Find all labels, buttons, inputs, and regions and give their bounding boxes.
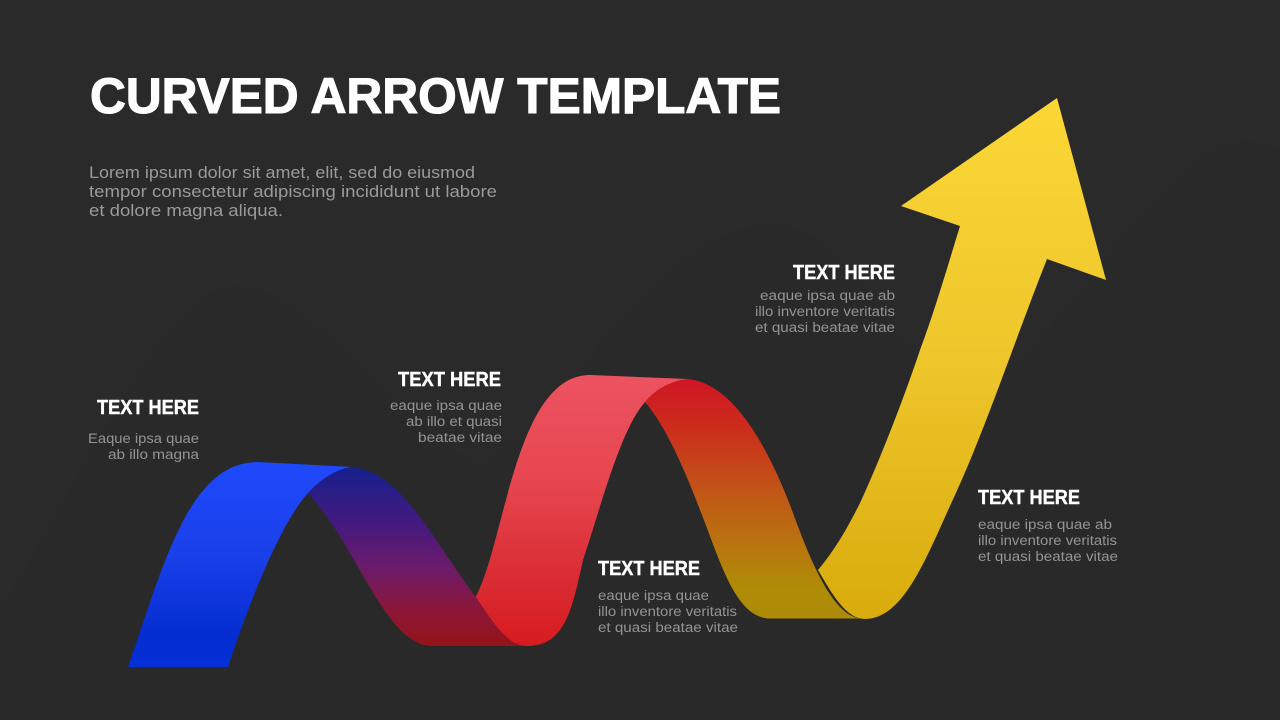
label 1 bbox=[88, 397, 200, 462]
label 2: beatae vitae bbox=[418, 430, 502, 445]
curved arrow ribbon bbox=[128, 98, 1106, 667]
label 1: Eaque ipsa quae bbox=[88, 431, 199, 446]
title: CURVED ARROW TEMPLATE bbox=[90, 68, 781, 124]
ribbon: purple fold bbox=[308, 467, 527, 646]
label 5: TEXT HERE bbox=[978, 487, 1080, 509]
intro text: Lorem ipsum dolor sit amet, elit, sed do eiusmod bbox=[89, 164, 475, 182]
intro text bbox=[89, 164, 497, 220]
label 3: illo inventore veritatis bbox=[598, 604, 737, 619]
ribbon: blue start segment bbox=[128, 462, 352, 667]
label 2: ab illo et quasi bbox=[406, 414, 502, 429]
label 3: TEXT HERE bbox=[598, 558, 700, 580]
label 5: et quasi beatae vitae bbox=[978, 549, 1118, 564]
label 1: ab illo magna bbox=[108, 447, 200, 462]
label 3: eaque ipsa quae bbox=[598, 588, 709, 603]
ribbon: red segment bbox=[475, 375, 688, 646]
label 1: TEXT HERE bbox=[97, 397, 199, 419]
label 5: eaque ipsa quae ab bbox=[978, 517, 1112, 532]
label 4: TEXT HERE bbox=[793, 262, 895, 284]
ribbon: yellow arrow with head bbox=[818, 98, 1106, 619]
label 3 bbox=[598, 558, 738, 635]
label 4: eaque ipsa quae ab bbox=[760, 288, 895, 303]
label 4: et quasi beatae vitae bbox=[755, 320, 895, 335]
label 5: illo inventore veritatis bbox=[978, 533, 1117, 548]
ribbon: orange fold bbox=[645, 379, 862, 618]
label 2 bbox=[390, 369, 502, 445]
intro text: et dolore magna aliqua. bbox=[89, 202, 283, 220]
label 4 bbox=[755, 262, 895, 335]
intro text: tempor consectetur adipiscing incididunt ut labore bbox=[89, 183, 497, 201]
label 4: illo inventore veritatis bbox=[755, 304, 895, 319]
label 3: et quasi beatae vitae bbox=[598, 620, 738, 635]
label 5 bbox=[978, 487, 1118, 564]
label 2: TEXT HERE bbox=[398, 369, 501, 391]
label 2: eaque ipsa quae bbox=[390, 398, 502, 413]
